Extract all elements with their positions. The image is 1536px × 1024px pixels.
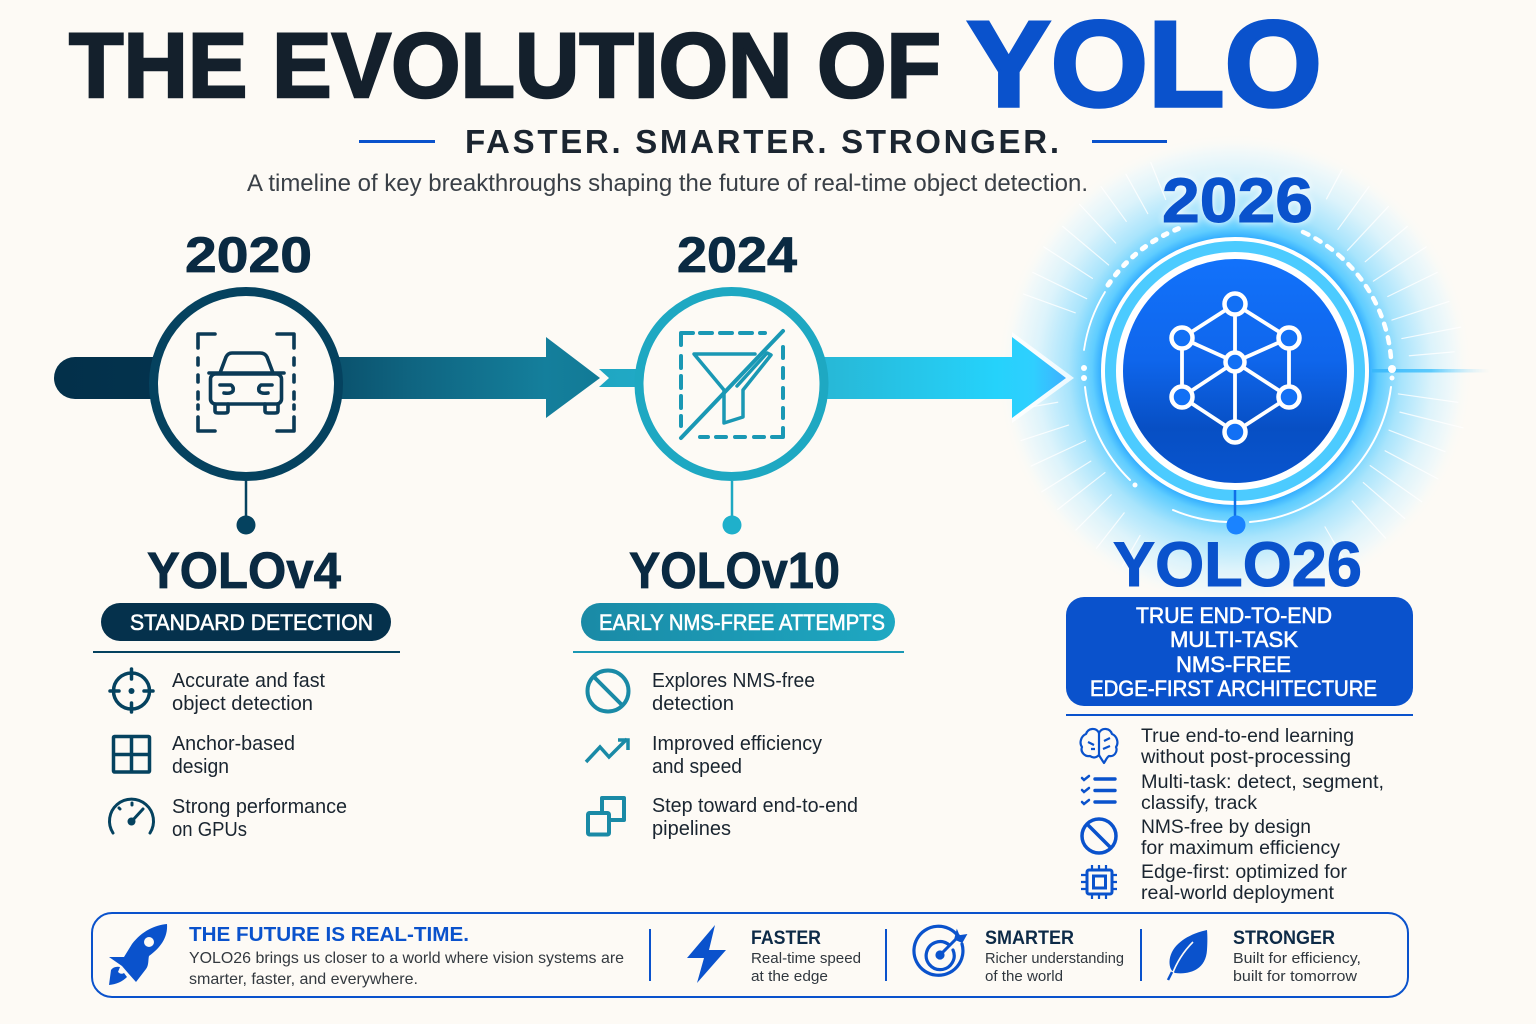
text: true end-to-end: without post-processing xyxy=(1140,747,1351,768)
icon: crosshair xyxy=(110,669,153,712)
icon: rocket xyxy=(109,924,167,985)
panel: feature tags: TRUE END-TO-END xyxy=(1136,603,1332,628)
text: multi-task xyxy=(1141,772,1384,814)
milestone circle 2020 xyxy=(154,292,338,534)
text: NMS-free by design xyxy=(1141,817,1340,859)
text: edge-first: real-world deployment xyxy=(1141,883,1335,904)
panel: feature tags: MULTI-TASK xyxy=(1170,627,1298,652)
text: smarter xyxy=(985,928,1124,985)
text: edge-first xyxy=(1141,862,1348,904)
title: THE EVOLUTION OF xyxy=(69,15,941,117)
column 2: YOLOv10 xyxy=(573,542,904,840)
pill: standard detection xyxy=(101,603,391,641)
orbit rings xyxy=(1081,228,1396,522)
text: NMS-free by design: for maximum efficiency xyxy=(1141,838,1340,859)
title xyxy=(69,0,1322,132)
heading: YOLOv4: YOLOv4 xyxy=(147,542,342,599)
pill: early NMS-free attempts: EARLY NMS-FREE ATTEMPTS xyxy=(599,610,885,635)
milestone circle 2024 xyxy=(639,292,824,534)
text: stronger: built for tomorrow xyxy=(1233,968,1357,985)
icon: no sign xyxy=(1082,819,1116,853)
icon: no sign xyxy=(588,670,628,712)
text: stronger: Built for efficiency, xyxy=(1233,950,1361,967)
icon: lightning bolt xyxy=(687,925,726,983)
text: explores NMS-free xyxy=(652,670,815,715)
text: improved efficiency xyxy=(652,733,822,778)
text: step toward end-to-end xyxy=(652,795,858,840)
text: stronger xyxy=(1233,928,1361,985)
text: faster: FASTER xyxy=(751,928,821,949)
icon: gauge xyxy=(110,799,154,833)
title: YOLO xyxy=(967,0,1322,132)
heading: YOLOv10: YOLOv10 xyxy=(629,542,840,599)
milestone circle 2026 xyxy=(1081,228,1396,534)
arrow 2: bright cyan timeline segment xyxy=(599,332,1074,423)
text: smarter: of the world xyxy=(985,968,1063,985)
glow around 2026 milestone xyxy=(997,133,1490,609)
icon: brain xyxy=(1081,729,1117,763)
text: step toward end-to-end: Step toward end-to-end xyxy=(652,795,858,817)
text: strong performance xyxy=(172,796,347,841)
callout: the future is real-time: smarter, faster, and everywhere. xyxy=(189,971,418,988)
text: accurate and fast xyxy=(172,670,325,715)
year 2026: 2026 xyxy=(1162,166,1313,236)
panel: feature tags: EDGE-FIRST ARCHITECTURE xyxy=(1090,676,1377,701)
text: anchor-based: Anchor-based xyxy=(172,733,295,755)
column 3: YOLO26 xyxy=(1066,530,1413,904)
arrow 1: dark teal timeline segment xyxy=(54,337,600,418)
year 2024: 2024 xyxy=(677,227,797,283)
description: A timeline of key breakthroughs shaping the future of real-time object detection. xyxy=(247,170,1088,197)
text: improved efficiency: Improved efficiency xyxy=(652,733,822,755)
icon: chip xyxy=(1081,865,1117,899)
callout: the future is real-time xyxy=(189,924,624,988)
callout: the future is real-time: THE FUTURE IS REAL-TIME. xyxy=(189,924,469,946)
callout: the future is real-time: YOLO26 brings us closer to a world where vision systems are xyxy=(189,950,624,967)
pill: standard detection: STANDARD DETECTION xyxy=(130,610,373,635)
text: accurate and fast: Accurate and fast xyxy=(172,670,325,692)
heading: YOLO26: YOLO26 xyxy=(1113,530,1362,600)
text: true end-to-end: True end-to-end learning xyxy=(1141,726,1354,747)
text: improved efficiency: and speed xyxy=(652,756,742,778)
text: multi-task: classify, track xyxy=(1141,793,1258,814)
text: anchor-based xyxy=(172,733,295,778)
text: strong performance: on GPUs xyxy=(172,819,247,841)
subtitle tagline: FASTER. SMARTER. STRONGER. xyxy=(465,123,1059,160)
text: anchor-based: design xyxy=(172,756,229,778)
text: edge-first: Edge-first: optimized for xyxy=(1141,862,1348,883)
text: strong performance: Strong performance xyxy=(172,796,347,818)
column 1: YOLOv4 xyxy=(93,542,400,841)
pill: early NMS-free attempts xyxy=(581,603,895,641)
icon: neural hexagon network xyxy=(1172,294,1300,442)
text: faster: at the edge xyxy=(751,968,828,985)
icon: crossed-out funnel xyxy=(681,331,783,438)
text: multi-task: Multi-task: detect, segment, xyxy=(1141,772,1384,793)
icon: checklist xyxy=(1082,776,1115,804)
text: stronger: STRONGER xyxy=(1233,928,1335,949)
text: step toward end-to-end: pipelines xyxy=(652,818,731,840)
text: true end-to-end xyxy=(1140,726,1354,768)
year 2020: 2020 xyxy=(185,227,312,283)
icon: leaf xyxy=(1168,930,1207,980)
text: faster xyxy=(751,928,861,985)
text: smarter: Richer understanding xyxy=(985,950,1124,967)
icon: trend up xyxy=(586,739,628,762)
icon: car in detection box xyxy=(198,334,294,431)
icon: anchor grid xyxy=(114,736,150,772)
panel: footer banner xyxy=(92,913,1408,997)
text: explores NMS-free: detection xyxy=(652,693,734,715)
icon: target with arrow xyxy=(914,926,966,975)
text: accurate and fast: object detection xyxy=(172,693,313,715)
text: NMS-free by design: NMS-free by design xyxy=(1141,817,1311,838)
panel: feature tags xyxy=(1066,597,1413,706)
text: explores NMS-free: Explores NMS-free xyxy=(652,670,815,692)
panel: feature tags: NMS-FREE xyxy=(1176,652,1291,677)
text: faster: Real-time speed xyxy=(751,950,861,967)
text: smarter: SMARTER xyxy=(985,928,1074,949)
icon: overlapping squares xyxy=(588,798,624,834)
